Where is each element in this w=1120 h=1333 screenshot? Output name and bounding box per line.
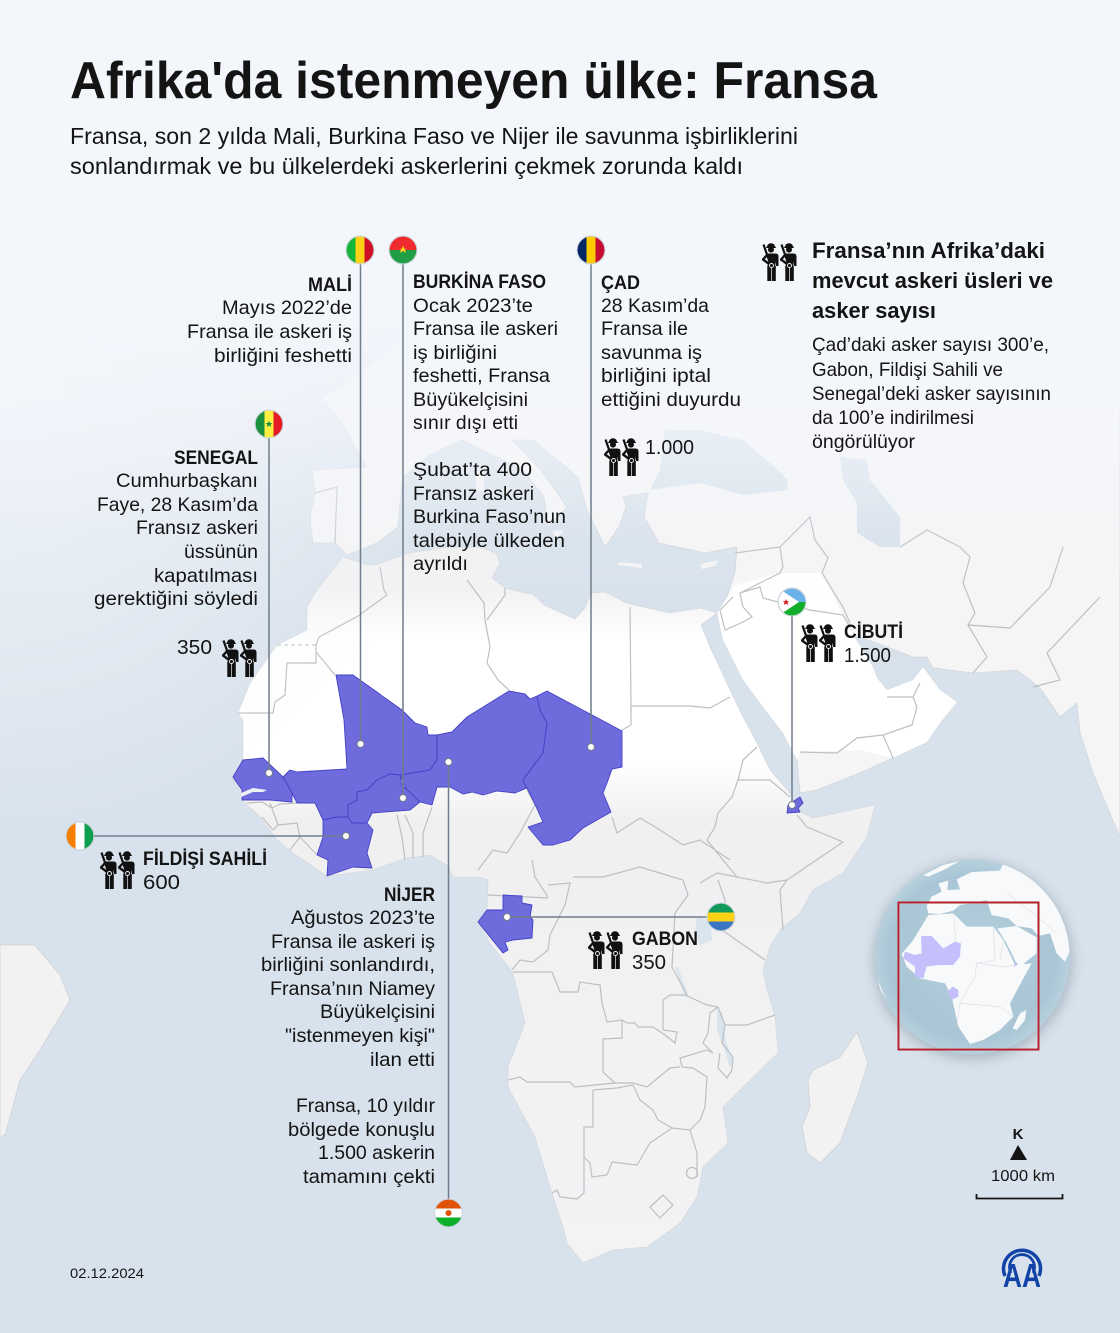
text block: Djibouti <box>844 620 903 667</box>
text block: Senegal: SENEGAL <box>174 447 258 469</box>
land: Eurasia <box>310 0 1120 837</box>
scale bar: 1000 km <box>991 1168 1055 1185</box>
text block: Niger: ilan etti <box>370 1049 435 1071</box>
text block: Chad: birliğini iptal <box>601 365 711 387</box>
subtitle <box>70 123 798 179</box>
country: Gambia gap <box>241 788 267 797</box>
text block: Burkina Faso: Burkina Faso’nun <box>413 506 566 528</box>
legend heading and note: Çad’daki asker sayısı 300’e, <box>812 334 1049 356</box>
country: Niger <box>400 691 547 805</box>
text block: Burkina Faso: Şubat’ta 400 <box>413 459 532 481</box>
text block: Djibouti: CİBUTİ <box>844 620 903 643</box>
land: Africa <box>233 547 875 1263</box>
icon: soldiers, Chad <box>605 438 638 476</box>
top fade over the map <box>0 0 1120 620</box>
legend heading and note: da 100’e indirilmesi <box>812 407 974 429</box>
text block: Côte d'Ivoire: 600 <box>143 872 180 894</box>
text block: Burkina Faso: Ocak 2023’te <box>413 295 533 317</box>
country: Chad <box>523 691 622 845</box>
legend heading and note: Gabon, Fildişi Sahili ve <box>812 359 1003 381</box>
left fade over the map <box>0 0 460 840</box>
flag: Mali <box>346 236 374 264</box>
text block: Niger <box>261 883 435 1188</box>
flag: Djibouti <box>778 588 806 616</box>
text block: Chad: savunma iş <box>601 342 702 364</box>
icon: soldiers, legend <box>763 243 796 281</box>
text block: Gabon: GABON <box>632 928 698 950</box>
text block: Niger: Fransa ile askeri iş <box>271 931 435 953</box>
text block: Mali: birliğini feshetti <box>214 345 352 367</box>
legend heading and note: mevcut askeri üsleri ve <box>812 268 1053 293</box>
locator globe <box>874 860 1072 1059</box>
text block: Chad: Fransa ile <box>601 318 688 340</box>
flag: Senegal <box>255 410 284 438</box>
inset frame <box>898 902 1038 1050</box>
text block: Niger: bölgede konuşlu <box>288 1119 435 1141</box>
legend heading and note: Senegal’deki asker sayısının <box>812 383 1051 405</box>
text block: Niger: Ağustos 2023’te <box>291 907 435 929</box>
legend heading and note: Fransa’nın Afrika’daki <box>812 238 1045 263</box>
text block: Mali: MALİ <box>308 273 352 296</box>
disputed border <box>277 644 316 646</box>
text block: Côte d'Ivoire: FİLDİŞİ SAHİLİ <box>143 847 267 870</box>
icon: soldiers, Djibouti <box>802 624 836 662</box>
legend heading and note <box>812 238 1053 453</box>
text block: Chad: ÇAD <box>601 272 640 294</box>
text block: Mali: Mayıs 2022’de <box>222 297 352 319</box>
text block: Mali <box>187 273 352 367</box>
text block: Burkina Faso: Fransız askeri <box>413 483 534 505</box>
text block: Senegal: üssünün <box>184 541 258 563</box>
land: Madagascar <box>802 1032 868 1163</box>
icon: soldiers, Côte d'Ivoire <box>101 851 134 889</box>
flag: Niger <box>434 1199 462 1228</box>
text block: Burkina Faso: Büyükelçisini <box>413 389 528 411</box>
lakes <box>675 917 733 1068</box>
title: Afrika'da istenmeyen ülke: Fransa <box>70 52 878 110</box>
text block: Burkina Faso <box>413 270 566 575</box>
text block: Burkina Faso: iş birliğini <box>413 342 497 364</box>
text block: Senegal: gerektiğini söyledi <box>94 588 258 610</box>
text block: Burkina Faso: talebiyle ülkeden <box>413 530 565 552</box>
text block: Chad <box>601 272 741 411</box>
text block: Niger: "istenmeyen kişi" <box>285 1025 435 1047</box>
land: islands <box>476 471 719 569</box>
text block: Chad: ettiğini duyurdu <box>601 389 741 411</box>
water: Black Sea <box>650 430 788 495</box>
text block: Niger: Fransa’nın Niamey <box>270 978 435 1000</box>
text block: Burkina Faso: ayrıldı <box>413 553 468 575</box>
text block: Burkina Faso: BURKİNA FASO <box>413 270 546 293</box>
scale bar <box>976 1168 1062 1198</box>
text block: Burkina Faso: Fransa ile askeri <box>413 318 558 340</box>
country borders <box>238 487 1100 1218</box>
text block: Senegal: Faye, 28 Kasım’da <box>97 494 258 516</box>
text block: Senegal <box>94 447 258 610</box>
flag: Gabon <box>707 903 735 932</box>
text block: Niger: NİJER <box>384 883 435 906</box>
leader lines and location dots <box>93 262 796 1200</box>
flag: Burkina Faso <box>389 236 417 264</box>
country: Gabon <box>478 895 533 953</box>
text block: Senegal: kapatılması <box>154 565 258 587</box>
legend heading and note: öngörülüyor <box>812 431 916 453</box>
icon: soldiers, Senegal <box>223 639 256 677</box>
text block: Niger: Fransa, 10 yıldır <box>296 1095 435 1117</box>
country: Côte d'Ivoire <box>317 817 373 876</box>
text block: Côte d'Ivoire <box>143 847 267 894</box>
north arrow <box>1010 1126 1027 1160</box>
text block: Senegal: Cumhurbaşkanı <box>116 470 258 492</box>
subtitle: Fransa, son 2 yılda Mali, Burkina Faso ve Nijer ile savunma işbirliklerini <box>70 123 798 149</box>
country: Mali <box>283 675 437 820</box>
text block: Gabon <box>632 928 698 974</box>
text block: Chad: 28 Kasım’da <box>601 295 709 317</box>
text block: Burkina Faso: sınır dışı etti <box>413 412 518 434</box>
country: Djibouti <box>787 797 803 813</box>
flag: Côte d'Ivoire <box>66 822 94 850</box>
text block: Burkina Faso: feshetti, Fransa <box>413 365 550 387</box>
troop count: Chad: 1.000 <box>645 437 694 459</box>
text block: Niger: 1.500 askerin <box>318 1142 435 1164</box>
text block: Niger: tamamını çekti <box>303 1166 435 1188</box>
water: Caspian Sea <box>840 457 900 547</box>
logo: AA: AA <box>1003 1257 1041 1294</box>
text block: Djibouti: 1.500 <box>844 645 891 667</box>
text block: Senegal: Fransız askeri <box>136 517 258 539</box>
north arrow: K <box>1013 1126 1024 1143</box>
country: Senegal <box>233 758 292 802</box>
text block: Niger: birliğini sonlandırdı, <box>261 954 435 976</box>
country: Burkina Faso <box>348 774 420 823</box>
land: Arabian peninsula <box>717 573 957 760</box>
troop count: Senegal: 350 <box>177 637 212 659</box>
flag: Chad <box>577 236 606 264</box>
logo: AA <box>1003 1250 1041 1294</box>
subtitle: sonlandırmak ve bu ülkelerdeki askerlerini çekmek zorunda kaldı <box>70 153 743 179</box>
text block: Niger: Büyükelçisini <box>320 1001 435 1023</box>
icon: soldiers, Gabon <box>589 931 622 969</box>
date: 02.12.2024 <box>70 1265 144 1281</box>
text block: Gabon: 350 <box>632 952 666 974</box>
land: South America <box>0 945 70 1137</box>
highlighted countries <box>233 675 803 953</box>
legend heading and note: asker sayısı <box>812 298 936 323</box>
text block: Mali: Fransa ile askeri iş <box>187 321 352 343</box>
